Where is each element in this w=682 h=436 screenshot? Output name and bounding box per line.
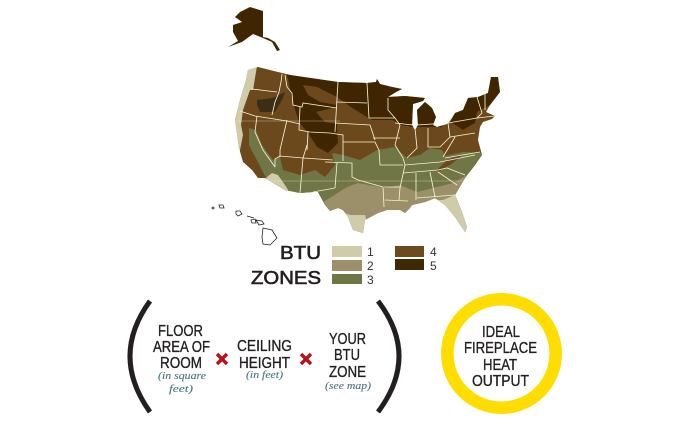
multiply sign (217, 354, 227, 364)
icon: Hawaii islands (212, 205, 277, 245)
legend title: BTU (280, 243, 321, 263)
zone 3 (249, 128, 490, 205)
left parenthesis (130, 301, 150, 412)
legend swatches: 4 (430, 245, 437, 259)
faint graticule lines (230, 121, 470, 181)
zone 4 Appalachian stripe (436, 155, 462, 171)
ceiling height term: CEILING (237, 338, 292, 355)
legend swatches: 1 (367, 245, 374, 259)
zone 2 (324, 174, 468, 233)
contiguous states zones (235, 67, 500, 233)
zone 4 base (235, 67, 500, 233)
BTU zone term: (see map) (325, 380, 371, 392)
result circle: HEAT (483, 357, 517, 374)
zone 4 plains lobes (303, 85, 372, 124)
legend title: ZONES (251, 268, 321, 288)
formula (130, 301, 399, 412)
right parenthesis (378, 301, 399, 412)
legend swatches: 5 (430, 259, 437, 273)
multiply sign (301, 354, 311, 364)
legend swatches: 2 (367, 259, 374, 273)
legend swatches (332, 245, 437, 287)
BTU zone term: BTU (334, 347, 360, 364)
zone 1 (235, 68, 467, 233)
floor area term: ROOM (160, 355, 202, 372)
floor area term: feet) (169, 383, 193, 395)
BTU zone term: ZONE (329, 364, 366, 381)
BTU zone term: YOUR (329, 331, 366, 348)
ceiling height term: HEIGHT (239, 355, 290, 372)
floor area term: AREA OF (153, 339, 210, 356)
ceiling height term: (in feet) (246, 369, 283, 381)
result circle: OUTPUT (472, 373, 529, 390)
map: BTU zones of the United States (212, 7, 510, 245)
floor area term (153, 323, 210, 395)
zone 5 Oregon-Idaho spot (257, 92, 285, 112)
legend swatches: 3 (367, 273, 374, 287)
icon: Alaska (228, 7, 280, 51)
result circle (447, 299, 556, 408)
floor area term: (in square (158, 370, 206, 382)
zone 5 northeast (450, 77, 500, 130)
result circle: FIREPLACE (464, 340, 537, 357)
legend title (251, 243, 321, 288)
state borders (240, 74, 495, 207)
BTU zone term (325, 331, 371, 392)
result circle: IDEAL (482, 324, 520, 341)
floor area term: FLOOR (158, 323, 203, 340)
ceiling height term (237, 338, 292, 381)
zone 5 north (286, 74, 442, 153)
